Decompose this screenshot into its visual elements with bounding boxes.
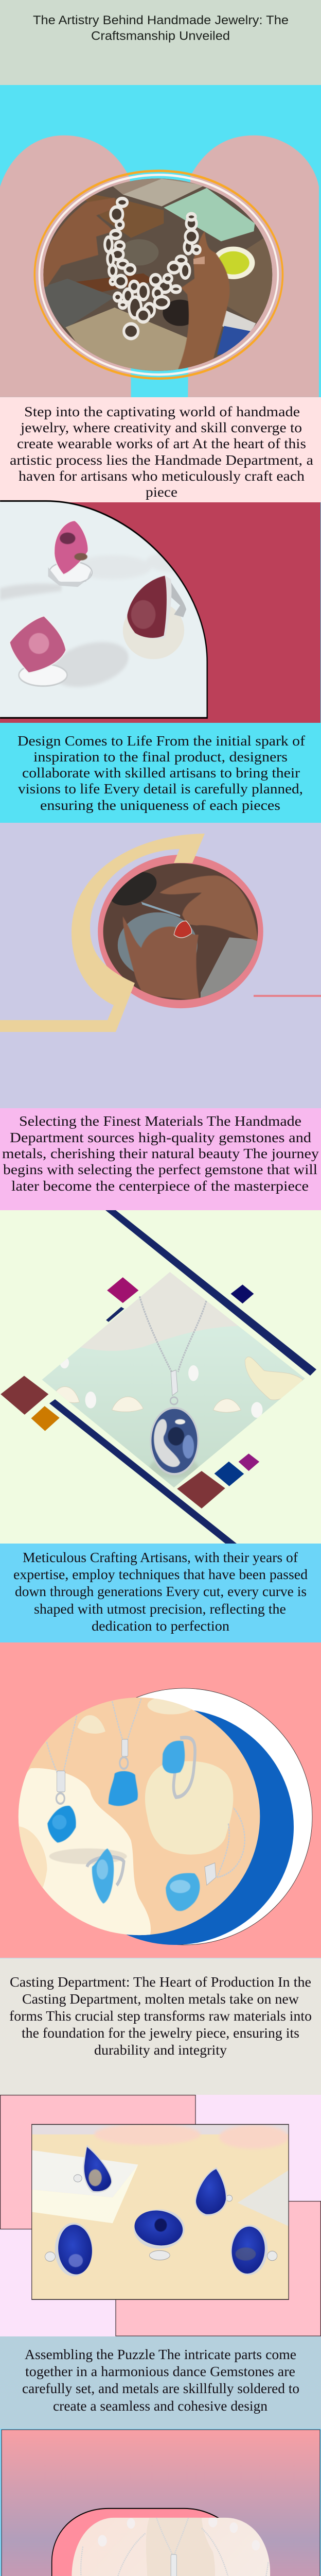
tan C-shaped arc (0, 834, 205, 1032)
text block: selecting the finest materials: Department sources high-quality gemstones and (10, 1130, 312, 1145)
photo: blue gemstone jewellery (16, 1696, 262, 1938)
text block: assembling the puzzle (0, 2336, 321, 2429)
panel: title header (0, 0, 321, 85)
diagonal navy bars (49, 1210, 316, 1544)
text block: selecting the finest materials: metals, cherishing their natural beauty The journey (2, 1146, 319, 1161)
panel: selecting materials photo (0, 823, 321, 1108)
text block: casting department: the foundation for the jewelry piece, ensuring its (22, 2025, 299, 2041)
title (33, 13, 289, 43)
text block: selecting the finest materials: Selecting the Finest Materials The Handmade (19, 1113, 301, 1129)
text block: design comes to life: inspiration to the final product, designers (33, 749, 288, 765)
text block: assembling the puzzle: create a seamless and cohesive design (53, 2398, 268, 2414)
text block: selecting the finest materials: begins with selecting the perfect gemstone that will (3, 1162, 317, 1177)
text block: meticulous crafting: down through generations Every cut, every curve is (15, 1584, 307, 1599)
text block: casting department: Casting Department: The Heart of Production In the (10, 1974, 311, 1990)
text block: design comes to life: visions to life Every detail is carefully planned, (18, 781, 303, 796)
text block: introduction: artistic process lies the Handmade Department, a (10, 452, 313, 468)
photo: hands holding necklace (41, 176, 274, 373)
text block: meticulous crafting: expertise, employ techniques that have been passed (13, 1567, 308, 1582)
text block: meticulous crafting: dedication to perfection (92, 1618, 230, 1634)
text block: selecting the finest materials: later become the centerpiece of the masterpiece (11, 1178, 309, 1194)
text block: casting department: forms This crucial step transforms raw materials into (9, 2008, 312, 2024)
text block: meticulous crafting: Meticulous Crafting Artisans, with their years of (23, 1550, 298, 1565)
panel: casting photo (0, 1642, 321, 1958)
text block: selecting the finest materials (0, 1108, 321, 1210)
text block: meticulous crafting (0, 1544, 321, 1642)
text block: assembling the puzzle: carefully set, and metals are skillfully soldered to (22, 2381, 299, 2396)
white and blue ovals (56, 1688, 312, 1945)
text block: introduction: create wearable works of art At the heart of this (17, 436, 306, 451)
panel: assembling photo (0, 2095, 321, 2336)
photo: lapis rings (31, 2124, 290, 2300)
text block: assembling the puzzle: together in a harmonious dance Gemstones are (25, 2364, 295, 2379)
text block: meticulous crafting: shaped with utmost precision, reflecting the (34, 1601, 286, 1617)
arch shapes (0, 135, 319, 397)
photo: three pendants on quartz (70, 2516, 271, 2576)
panel: design rings photo (0, 499, 321, 723)
photo: hands holding red gem (100, 861, 262, 1003)
text block: introduction: piece (146, 484, 177, 500)
title: Craftsmanship Unveiled (91, 29, 230, 43)
coloured diamonds (1, 1277, 259, 1509)
text block: casting department: durability and integrity (94, 2042, 227, 2058)
panel: pendant on diamond (0, 1210, 321, 1544)
text block: introduction: jewelry, where creativity and skill converge to (20, 420, 302, 435)
pink offset rectangles (1, 2095, 320, 2336)
text block: design comes to life: Design Comes to Life From the initial spark of (17, 733, 305, 749)
text block: casting department (0, 1958, 321, 2095)
panel: artisan photo (0, 85, 321, 397)
pink ring and photo (98, 855, 263, 1008)
pendant chain (139, 1296, 206, 1372)
text block: design comes to life (0, 723, 321, 823)
text block: assembling the puzzle: Assembling the Puzzle The intricate parts come (25, 2347, 296, 2362)
text block: casting department: Casting Department, molten metals take on new (22, 1991, 299, 2007)
text block: design comes to life: collaborate with skilled artisans to bring their (22, 765, 300, 781)
panel: personal touches photo (0, 2429, 321, 2576)
text block: introduction (0, 397, 321, 502)
text block: introduction: Step into the captivating world of handmade (24, 404, 300, 419)
photo: three pink gemstone rings (0, 499, 215, 720)
pink arch with outline (52, 2509, 245, 2576)
text block: design comes to life: ensuring the uniqueness of each pieces (40, 798, 280, 813)
oval frame rings (34, 171, 282, 379)
pink accent line (254, 995, 321, 997)
title: The Artistry Behind Handmade Jewelry: The (33, 13, 289, 27)
text block: introduction: haven for artisans who meticulously craft each (19, 468, 305, 484)
photo: sodalite pendant (1, 1268, 307, 1509)
gradient rectangle (2, 2430, 320, 2576)
